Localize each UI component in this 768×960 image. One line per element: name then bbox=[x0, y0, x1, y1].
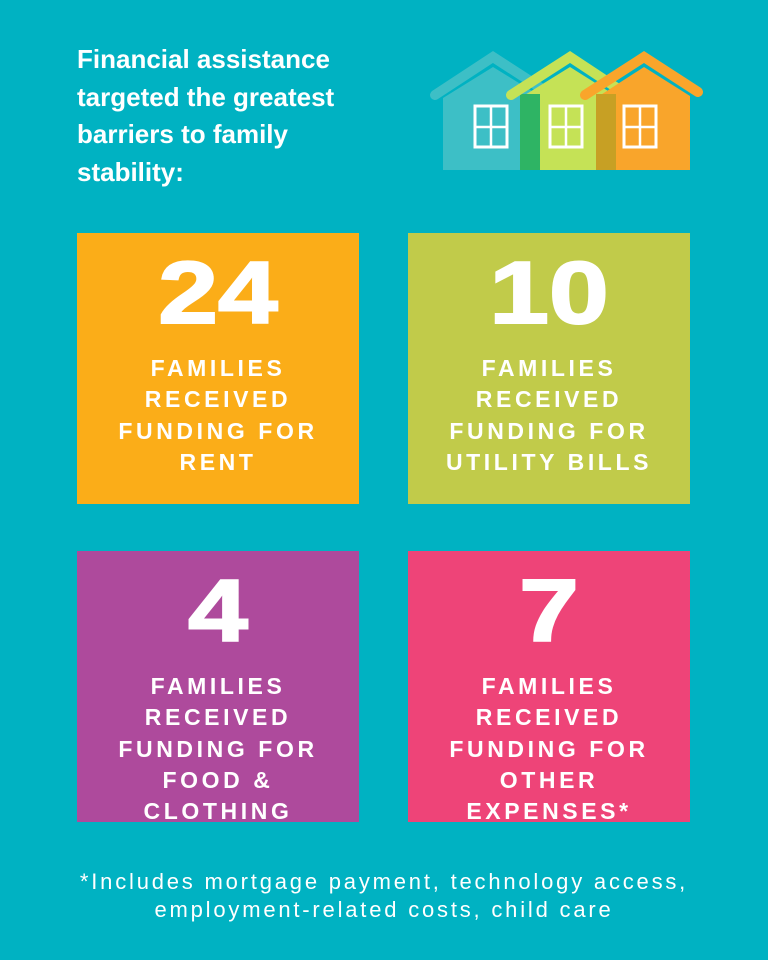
panel: food & clothing: 4 bbox=[188, 561, 248, 660]
panel: rent bbox=[77, 233, 359, 504]
panel: other expenses: RECEIVED bbox=[476, 704, 622, 730]
panel: rent: RECEIVED bbox=[145, 386, 291, 412]
panel: rent: 24 bbox=[158, 243, 278, 342]
panel: rent: RENT bbox=[179, 449, 256, 475]
icon: houses bbox=[430, 51, 703, 170]
panel: utility bills: RECEIVED bbox=[476, 386, 622, 412]
footnote: *Includes mortgage payment, technology access, bbox=[80, 869, 688, 894]
panel: utility bills: UTILITY BILLS bbox=[446, 449, 652, 475]
footnote: employment-related costs, child care bbox=[154, 897, 614, 922]
panel: food & clothing: FUNDING FOR bbox=[118, 736, 318, 762]
panel: food & clothing: FAMILIES bbox=[151, 673, 285, 699]
panel: food & clothing: RECEIVED bbox=[145, 704, 291, 730]
panel: food & clothing: FOOD & bbox=[162, 767, 274, 793]
panel: utility bills: FUNDING FOR bbox=[449, 418, 649, 444]
title: Financial assistance targeted the greatest barriers to family stability: bbox=[77, 44, 334, 186]
panel: other expenses bbox=[408, 551, 690, 822]
panel: rent: FAMILIES bbox=[151, 355, 285, 381]
panel: other expenses: OTHER bbox=[500, 767, 598, 793]
panel: utility bills: 10 bbox=[489, 243, 609, 342]
panel: other expenses: 7 bbox=[519, 561, 579, 660]
panel: food & clothing: CLOTHING bbox=[144, 798, 292, 824]
panel: other expenses: FAMILIES bbox=[482, 673, 616, 699]
panel: rent: FUNDING FOR bbox=[118, 418, 318, 444]
panel: other expenses: EXPENSES* bbox=[466, 798, 632, 824]
panel: utility bills bbox=[408, 233, 690, 504]
panel: food & clothing bbox=[77, 551, 359, 822]
footnote bbox=[80, 869, 688, 922]
panel: utility bills: FAMILIES bbox=[482, 355, 616, 381]
panel: other expenses: FUNDING FOR bbox=[449, 736, 649, 762]
